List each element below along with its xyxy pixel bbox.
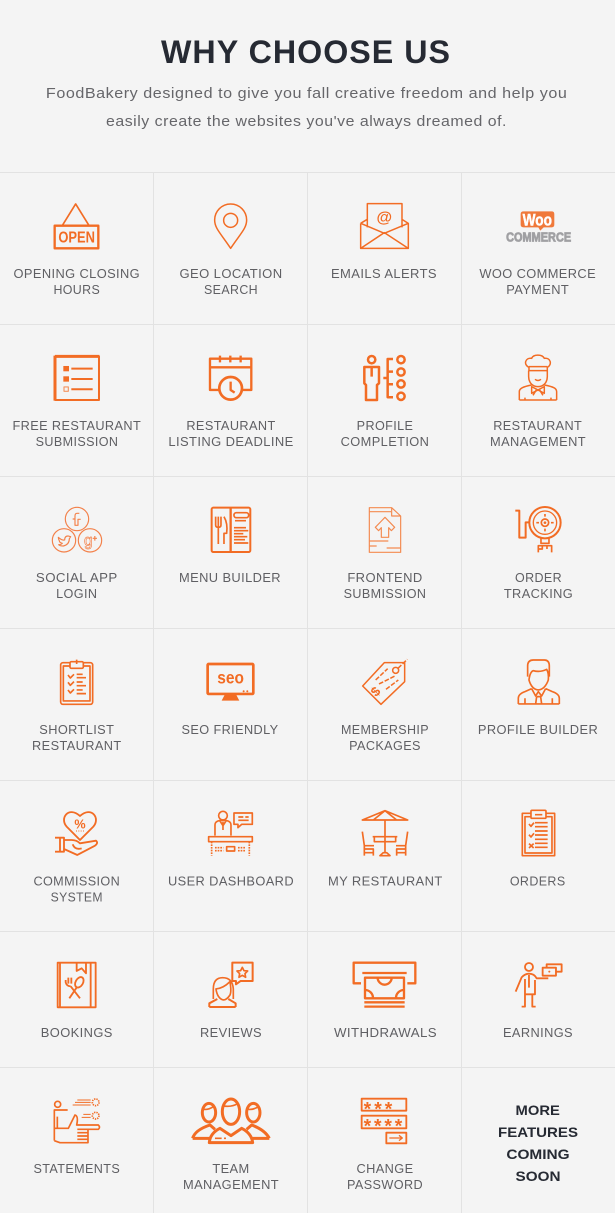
label: SHORTLIST [39,722,114,737]
feature: change password [347,1099,423,1192]
label: GEO LOCATION [180,266,282,281]
label: SOCIAL APP [36,570,118,585]
label: FREE RESTAURANT [12,418,141,433]
label [341,722,429,753]
feature: commission system [33,812,120,904]
label: PACKAGES [349,738,421,753]
title: WHY CHOOSE US [161,34,451,70]
label: CHANGE [356,1161,414,1176]
label: MY RESTAURANT [328,874,443,888]
icon: map pin [215,204,247,248]
label: LISTING DEADLINE [168,434,294,449]
feature: bookings [41,963,113,1040]
feature: menu builder [179,508,281,585]
label: TRACKING [504,586,573,601]
icon: person at desk [209,811,252,856]
feature: reviews [200,963,262,1040]
label: PROFILE [357,418,413,433]
label: FRONTEND [347,570,423,585]
label: SYSTEM [51,890,103,904]
icon: password fields: **** [364,1116,403,1137]
more features coming soon [498,1102,578,1184]
icon: patio table [362,811,408,856]
icon: woocommerce logo: Woo [523,210,552,229]
icon: woocommerce logo [506,210,571,244]
icon: three people [193,1099,269,1143]
label [36,570,118,601]
icon: social circles: g [84,533,93,550]
icon: seo monitor: seo [217,668,244,688]
icon: menu card [212,508,250,552]
label: MEMBERSHIP [341,722,429,737]
icon: open sign: OPEN [58,230,95,247]
label: SUBMISSION [344,586,426,601]
label: STATEMENTS [33,1161,120,1176]
icon: clipboard checklist [61,660,93,704]
label [490,418,586,449]
label: SEARCH [204,282,258,297]
more features coming soon: FEATURES [498,1124,578,1140]
feature: free restaurant submission [12,356,141,449]
feature: statements [33,1099,120,1176]
feature: my restaurant [328,811,443,888]
label: OPENING CLOSING [14,266,140,281]
feature: woo commerce payment [479,210,596,297]
label: ORDER [515,570,562,585]
more features coming soon: COMING [506,1146,570,1162]
label [344,570,426,601]
label: ORDERS [510,874,566,888]
label: MENU BUILDER [179,570,281,585]
label: HOURS [53,282,100,297]
icon: woocommerce logo: COMMERCE [506,229,571,244]
label [347,1161,423,1192]
label [183,1161,279,1192]
intro text [46,85,567,130]
icon: recipe book [58,963,96,1007]
intro text: FoodBakery designed to give you fall creative freedom and help you [46,85,567,102]
icon: password fields [362,1099,406,1143]
label: PASSWORD [347,1177,423,1192]
label: RESTAURANT [186,418,276,433]
label [479,266,596,297]
label: EMAILS ALERTS [331,266,437,281]
icon: list document [55,356,99,401]
more features coming soon: MORE [516,1102,560,1118]
label: WITHDRAWALS [334,1025,437,1040]
label: COMMISSION [33,874,120,888]
label: EARNINGS [503,1025,573,1040]
label: TEAM [212,1161,250,1176]
label [14,266,140,297]
label: MANAGEMENT [183,1177,279,1192]
feature: team management [183,1099,279,1192]
icon: target locator [515,507,561,552]
label: MANAGEMENT [490,434,586,449]
label [12,418,141,449]
icon: password fields: *** [364,1099,393,1120]
feature: geo location search [180,204,282,297]
icon: businessman [518,660,559,704]
label [341,418,429,449]
label: PAYMENT [506,282,569,297]
icon: heart in hand: % [74,818,86,832]
feature: order tracking [504,507,573,601]
label: PROFILE BUILDER [478,722,598,737]
feature: frontend submission [344,508,426,601]
feature: orders [510,810,566,888]
label: SEO FRIENDLY [182,722,278,737]
intro text: easily create the websites you've always dreamed of. [106,113,507,130]
label: BOOKINGS [41,1025,113,1040]
label [168,418,294,449]
label [504,570,573,601]
label: RESTAURANT [32,738,122,753]
icon: pointing hand [54,1099,99,1143]
feature: user dashboard [168,811,294,888]
icon: profile tree [364,356,405,400]
feature: restaurant management [490,355,586,449]
icon: order clipboard [522,810,555,856]
label: WOO COMMERCE [479,266,596,281]
more features coming soon: SOON [516,1168,560,1184]
label: LOGIN [56,586,97,601]
icon: chef [519,355,557,400]
feature: membership packages [341,659,429,753]
feature: profile completion [341,356,429,449]
feature: shortlist restaurant [32,660,122,753]
label: USER DASHBOARD [168,874,294,888]
icon: calendar clock [210,356,251,400]
label [33,874,120,904]
label: RESTAURANT [493,418,582,433]
icon: price tag: $ [368,683,384,699]
feature: social app login [36,507,118,601]
feature: emails alerts [331,204,437,281]
feature: restaurant listing deadline [168,356,294,449]
feature: earnings [503,963,573,1040]
icon: man with cash [516,963,562,1007]
feature: profile builder [478,660,598,737]
label: SUBMISSION [36,434,118,449]
label [32,722,122,753]
feature: seo friendly [182,664,278,737]
label [180,266,282,297]
feature: opening closing hours [14,204,140,297]
icon: envelope: @ [377,209,392,226]
icon: upload document [369,508,401,552]
icon: cash slot [354,963,415,1007]
feature: withdrawals [334,963,437,1040]
label: COMPLETION [341,434,429,449]
icon: woman with star bubble [209,963,253,1007]
label: REVIEWS [200,1025,262,1040]
